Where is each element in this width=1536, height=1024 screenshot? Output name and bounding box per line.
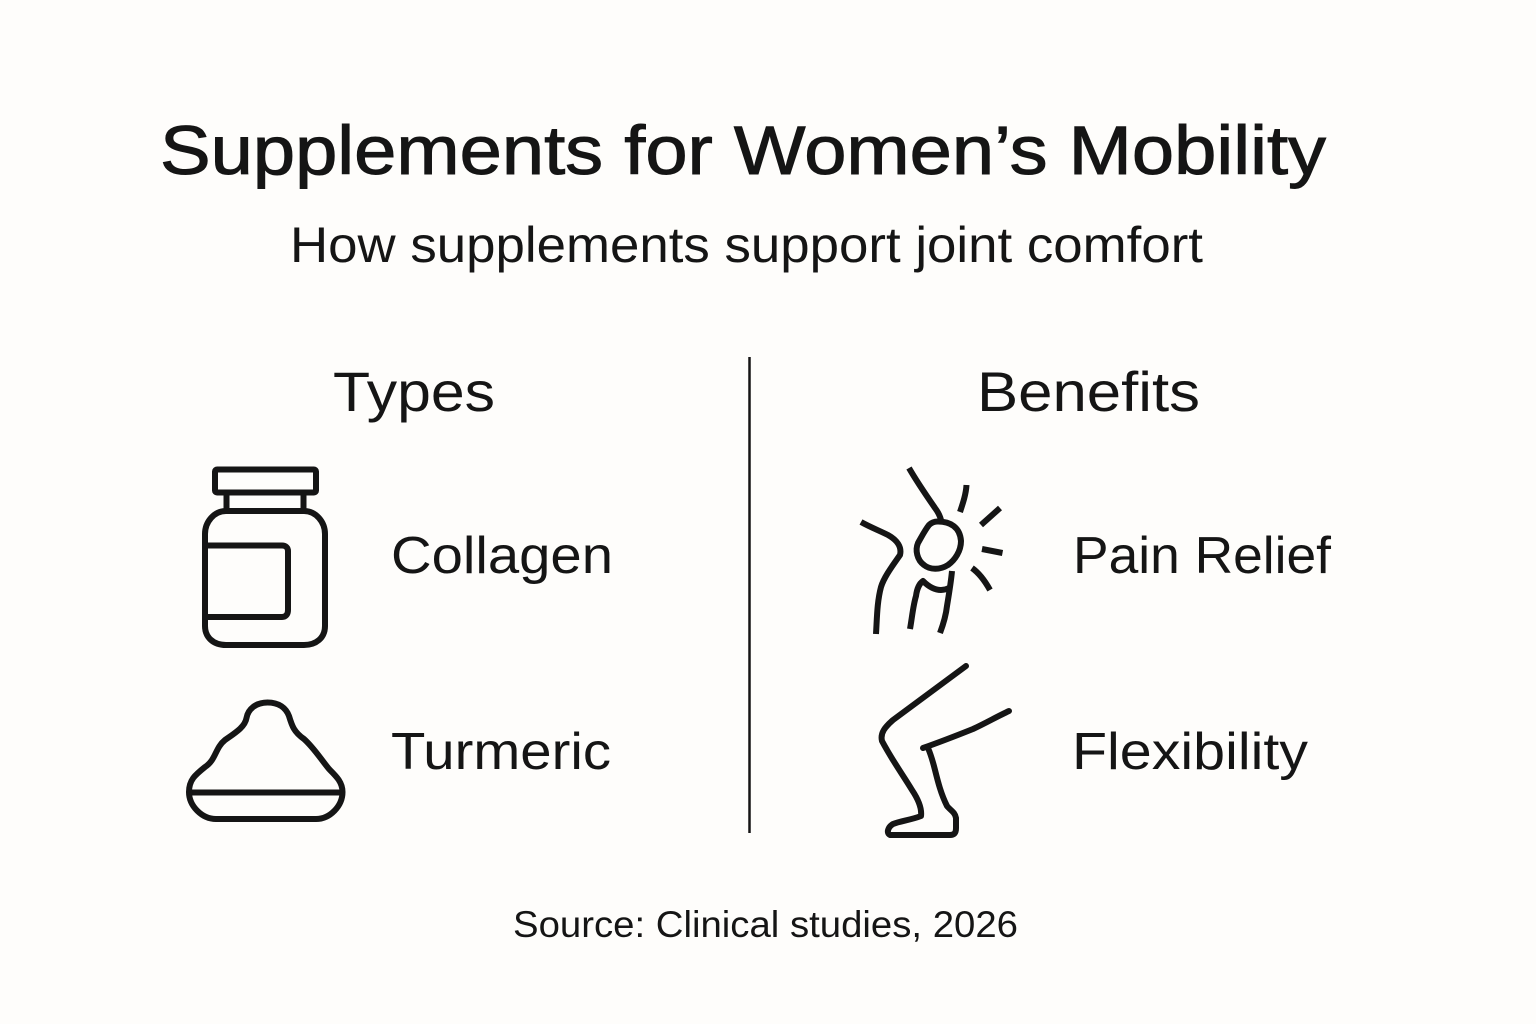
label: pain relief: Pain Relief	[1073, 527, 1332, 585]
panel: benefits	[861, 360, 1332, 835]
label: collagen: Collagen	[391, 527, 613, 585]
divider between columns	[748, 357, 751, 833]
icon: painful knee	[861, 468, 1002, 634]
icon: supplement jar	[205, 470, 325, 645]
icon: turmeric powder bowl	[189, 702, 342, 819]
panel: types	[189, 360, 613, 819]
source note: Source: Clinical studies, 2026	[513, 903, 1018, 945]
icon: bent leg	[882, 666, 1009, 835]
heading: types: Types	[333, 360, 495, 423]
subtitle: How supplements support joint comfort	[290, 217, 1203, 273]
heading: benefits: Benefits	[977, 360, 1200, 423]
title: Supplements for Women’s Mobility	[160, 112, 1327, 189]
label: flexibility: Flexibility	[1072, 723, 1308, 781]
label: turmeric: Turmeric	[391, 723, 611, 781]
